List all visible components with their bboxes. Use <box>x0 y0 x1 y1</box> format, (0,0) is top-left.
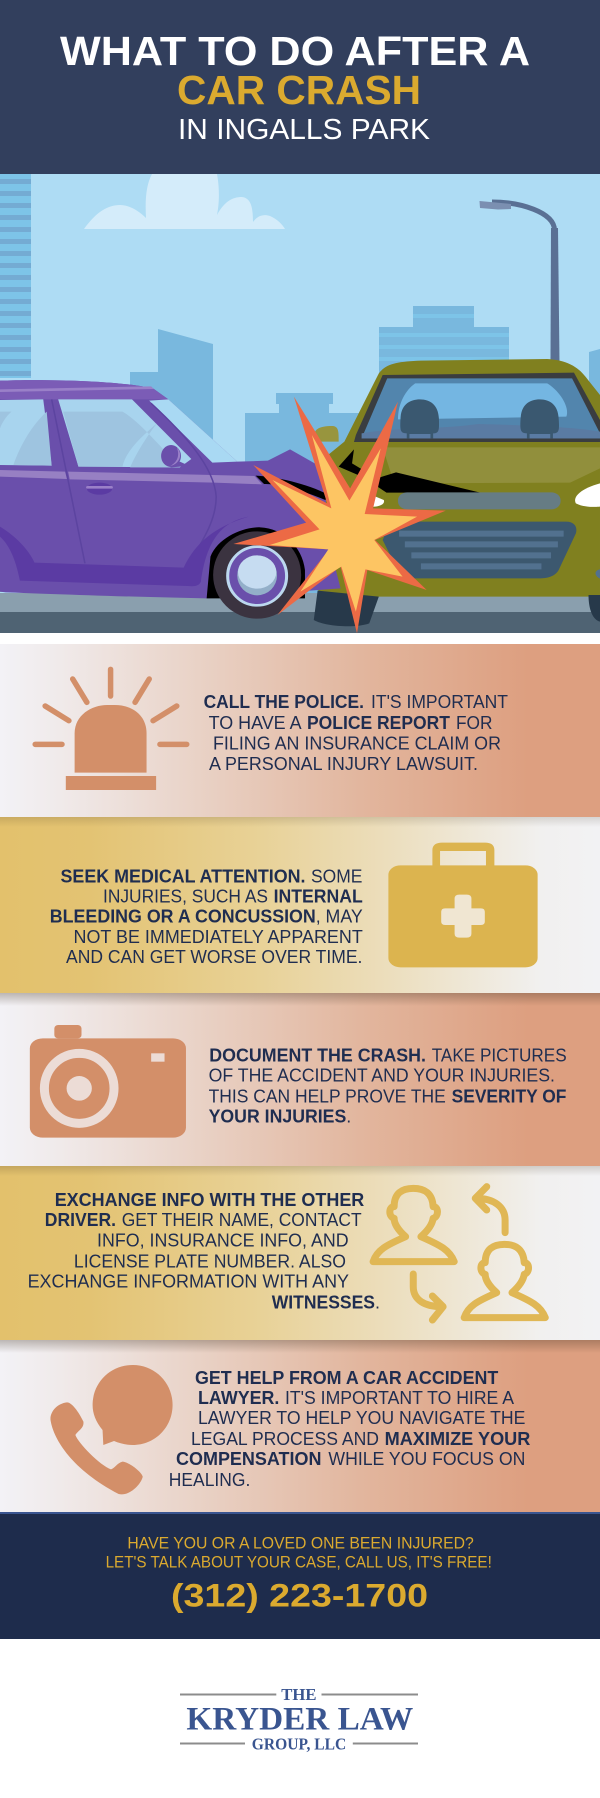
text: exchange info: LICENSE PLATE NUMBER. ALSO <box>74 1251 346 1271</box>
text: exchange info: . <box>375 1292 380 1312</box>
text: call the police: TO HAVE A <box>209 713 302 733</box>
cloud <box>84 174 285 229</box>
text: seek medical attention: , MAY <box>316 906 363 926</box>
left striped building <box>0 174 31 378</box>
text: seek medical attention: INTERNAL <box>274 886 363 906</box>
title: IN INGALLS PARK <box>178 114 431 146</box>
text: exchange info: DRIVER. <box>45 1210 116 1230</box>
text: exchange info: EXCHANGE INFO WITH THE OTHER <box>55 1190 364 1210</box>
text: exchange info: EXCHANGE INFORMATION WITH ANY <box>28 1271 349 1291</box>
text: seek medical attention: AND CAN GET WORSE OVER TIME. <box>66 947 362 967</box>
title: CAR CRASH <box>177 67 421 113</box>
text: document the crash: SEVERITY OF <box>452 1087 566 1107</box>
side mirror <box>161 445 189 467</box>
street lamp <box>480 201 560 362</box>
text: exchange info: GET THEIR NAME, CONTACT <box>122 1210 362 1230</box>
phone number: (312) 223-1700 <box>171 1578 428 1614</box>
text: seek medical attention: SEEK MEDICAL ATTENTION. <box>60 866 306 886</box>
text: document the crash: TAKE PICTURES <box>432 1046 567 1066</box>
icon: phone with speech bubble <box>50 1365 173 1494</box>
icon: two people exchanging information <box>373 1187 545 1320</box>
text: get help: WHILE YOU FOCUS ON <box>328 1449 525 1469</box>
door handle <box>86 483 113 495</box>
text: get help: MAXIMIZE YOUR <box>385 1429 530 1449</box>
panel: seek medical attention <box>0 817 600 993</box>
crumpled front <box>256 476 329 500</box>
logo: The Kryder Law Group: KRYDER LAW <box>186 1701 413 1737</box>
header panel <box>0 0 600 174</box>
text: exchange info: INFO, INSURANCE INFO, AND <box>97 1231 349 1251</box>
text: call the police: IT'S IMPORTANT <box>371 692 508 712</box>
text: call the police: A PERSONAL INJURY LAWSUIT. <box>209 754 478 774</box>
text: get help: HEALING. <box>169 1470 250 1490</box>
call to action text <box>106 1533 492 1571</box>
call to action footer <box>0 1512 600 1639</box>
text: document the crash: THIS CAN HELP PROVE THE <box>209 1087 446 1107</box>
logo: The Kryder Law Group: GROUP, LLC <box>252 1734 346 1753</box>
purple car <box>0 380 341 619</box>
text: call the police: POLICE REPORT <box>307 713 450 733</box>
text: get help: IT'S IMPORTANT TO HIRE A <box>285 1388 514 1408</box>
call to action text: LET'S TALK ABOUT YOUR CASE, CALL US, IT'S FREE! <box>106 1552 492 1571</box>
text: seek medical attention: INJURIES, SUCH AS <box>103 886 268 906</box>
car seats <box>400 399 559 438</box>
title <box>60 28 530 146</box>
text: document the crash <box>209 1046 567 1127</box>
text: call the police: FILING AN INSURANCE CLAIM OR <box>213 734 501 754</box>
text: get help: LAWYER TO HELP YOU NAVIGATE THE <box>198 1408 525 1428</box>
text: call the police <box>204 692 508 774</box>
text: seek medical attention: NOT BE IMMEDIATELY APPARENT <box>74 927 363 947</box>
text: get help <box>169 1368 530 1490</box>
text: seek medical attention: BLEEDING OR A CONCUSSION <box>50 906 316 926</box>
call to action text: HAVE YOU OR A LOVED ONE BEEN INJURED? <box>127 1533 474 1552</box>
crash star <box>233 397 446 633</box>
panel: document the crash <box>0 993 600 1166</box>
text: exchange info: WITNESSES <box>272 1292 375 1312</box>
olive car <box>310 359 600 626</box>
icon: camera <box>30 1025 186 1138</box>
logo: The Kryder Law Group <box>180 1685 418 1753</box>
background buildings <box>130 306 600 600</box>
text: document the crash: . <box>346 1107 351 1127</box>
panel: exchange info <box>0 1166 600 1340</box>
text: get help: COMPENSATION <box>176 1449 322 1469</box>
road <box>0 593 600 633</box>
text: document the crash: YOUR INJURIES <box>209 1107 346 1127</box>
text: document the crash: DOCUMENT THE CRASH. <box>209 1046 426 1066</box>
text: call the police: FOR <box>456 713 492 733</box>
text: document the crash: OF THE ACCIDENT AND YOUR INJURIES. <box>209 1066 555 1086</box>
text: get help: GET HELP FROM A CAR ACCIDENT <box>195 1368 498 1388</box>
panel: call the police <box>0 644 600 817</box>
title: WHAT TO DO AFTER A <box>60 28 530 74</box>
illustration: car crash scene <box>0 174 600 633</box>
text: exchange info <box>28 1190 380 1312</box>
wheel <box>207 527 305 619</box>
text: get help: LEGAL PROCESS AND <box>191 1429 379 1449</box>
text: seek medical attention: SOME <box>311 866 362 886</box>
text: call the police: CALL THE POLICE. <box>204 692 364 712</box>
icon: medical kit <box>388 843 538 967</box>
icon: police siren <box>35 669 187 790</box>
panel: get help from a lawyer <box>0 1340 600 1512</box>
text: seek medical attention <box>50 866 363 967</box>
text: get help: LAWYER. <box>198 1388 279 1408</box>
logo: The Kryder Law Group: THE <box>281 1685 316 1704</box>
